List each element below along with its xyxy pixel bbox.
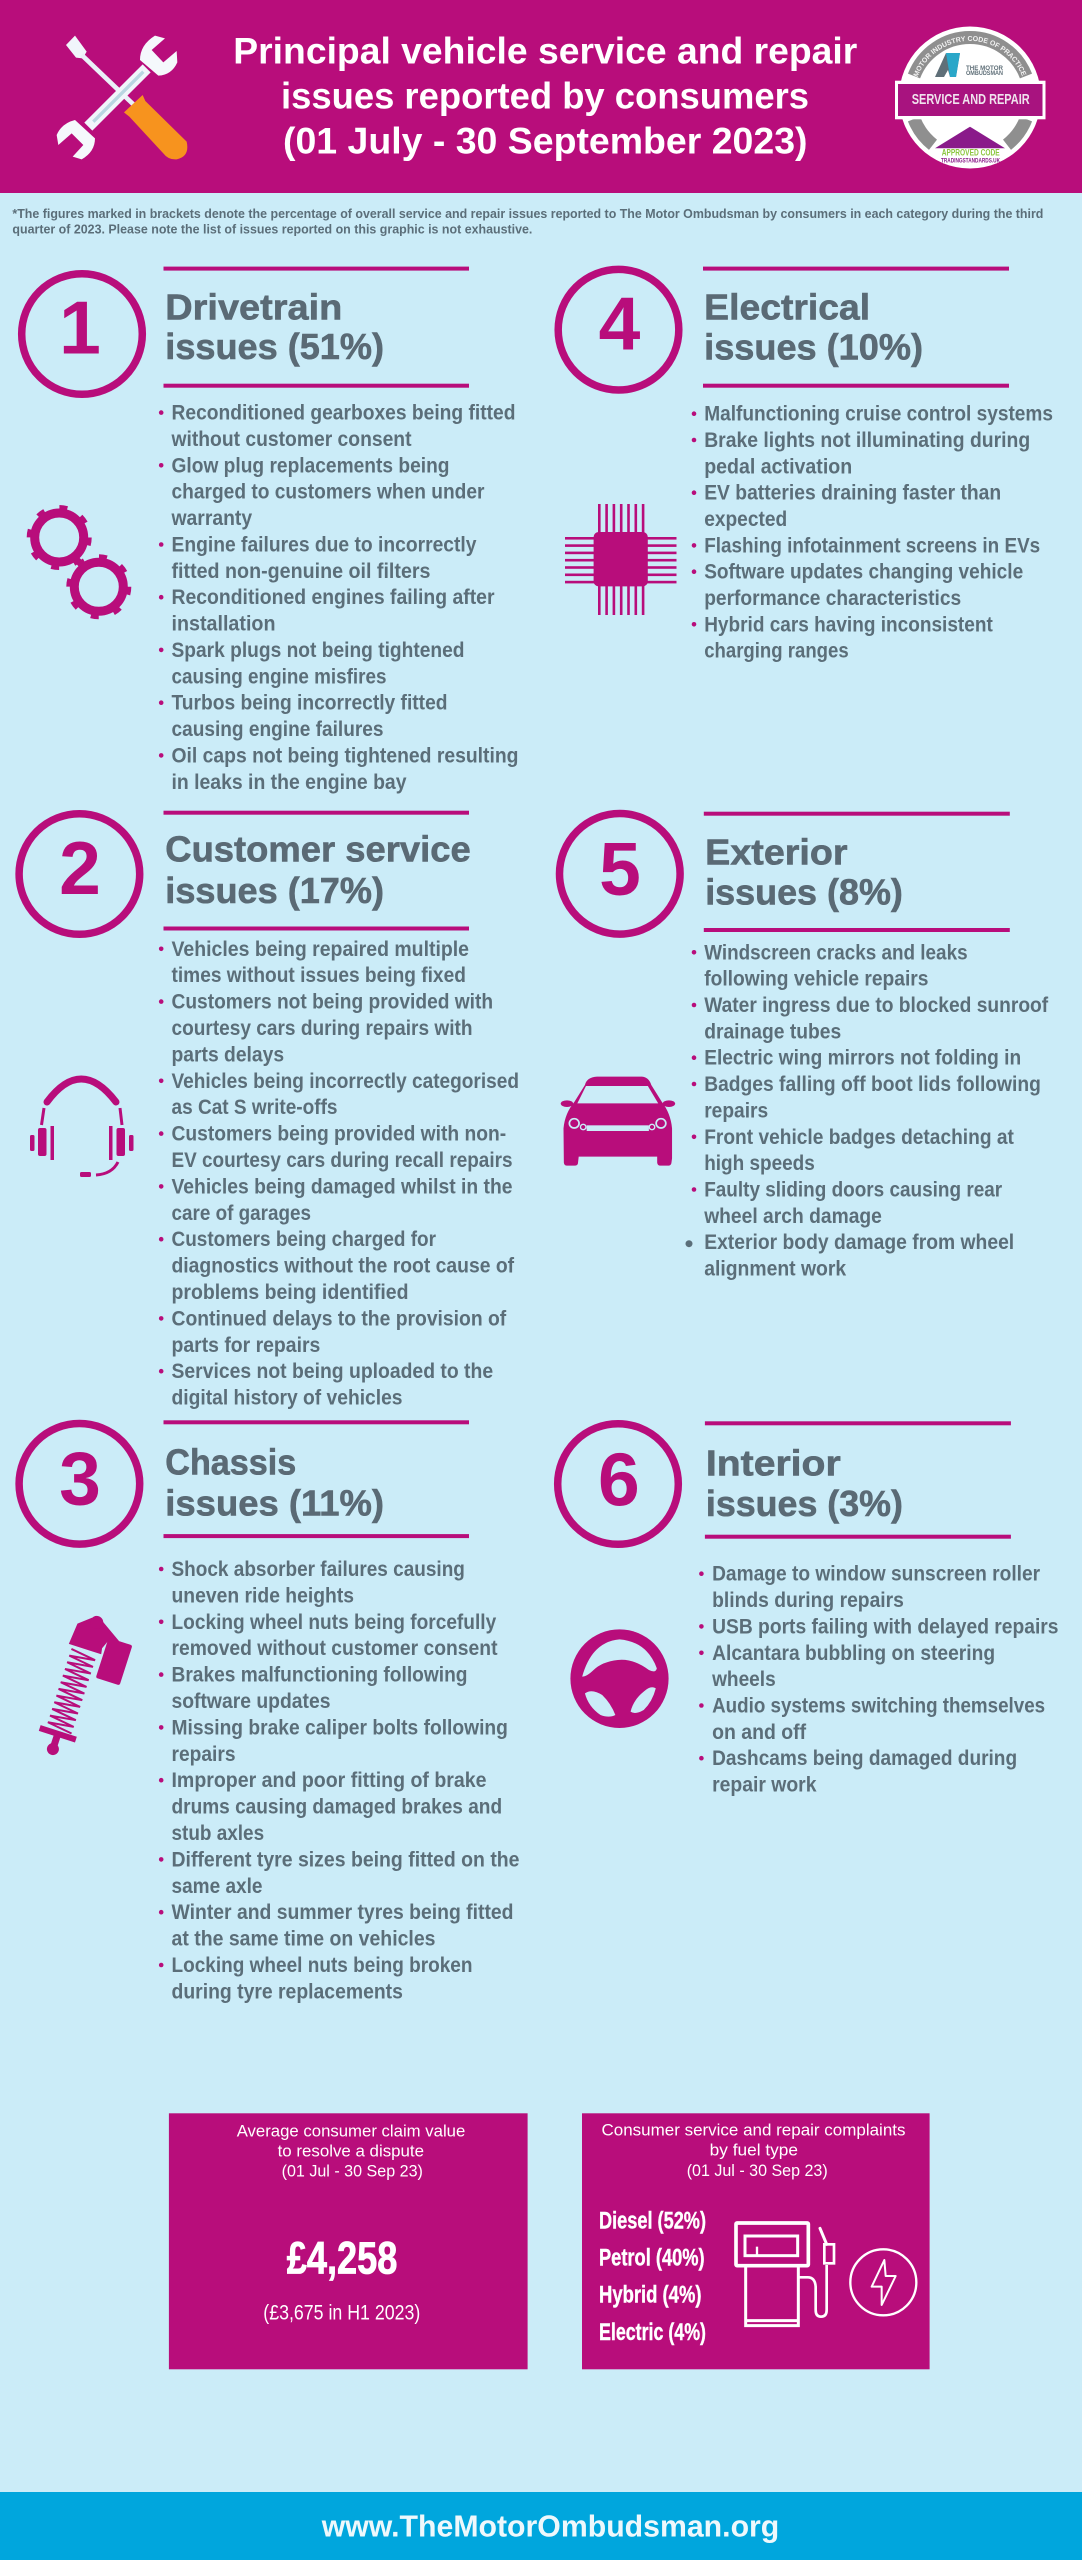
panel: exterior issues [560, 812, 1049, 1280]
issue list: electrical: Brake lights not illuminating during [704, 429, 1030, 452]
fuel type list: Hybrid (4%) [599, 2282, 702, 2309]
issue list: interior: Damage to window sunscreen roller [712, 1563, 1040, 1586]
issue list: interior: Alcantara bubbling on steering [712, 1642, 995, 1665]
issue list: chassis: Locking wheel nuts being broken [172, 1954, 472, 1977]
heading: drivetrain: Drivetrain [165, 287, 342, 328]
issue list: drivetrain: without customer consent [171, 428, 412, 451]
icon: electric bolt [850, 2249, 916, 2315]
stat box heading: Consumer service and repair complaints [602, 2121, 906, 2140]
icon: car [561, 1077, 675, 1166]
fuel type list: Diesel (52%) [599, 2207, 706, 2234]
heading: customer service: Customer service [165, 828, 471, 869]
heading: electrical: Electrical [704, 287, 870, 328]
issue list: interior: USB ports failing with delayed repairs [712, 1615, 1058, 1638]
issue list: customer service: courtesy cars during repairs with [172, 1017, 472, 1040]
issue list: exterior: following vehicle repairs [704, 968, 928, 991]
issue list: customer service: parts delays [172, 1043, 284, 1066]
number 3 [19, 1424, 140, 1544]
heading: exterior [704, 812, 1010, 932]
issue list: exterior: Badges falling off boot lids following [704, 1073, 1041, 1096]
number 4 [558, 269, 679, 390]
issue list: interior: blinds during repairs [712, 1589, 904, 1612]
issue list: drivetrain: Glow plug replacements being [172, 454, 450, 477]
panel: interior issues [558, 1421, 1058, 1796]
issue list: exterior: Water ingress due to blocked sunroof [704, 994, 1049, 1017]
issue list: drivetrain: Spark plugs not being tightened [172, 639, 464, 662]
issue list: customer service: diagnostics without the root cause of [172, 1255, 515, 1278]
heading: exterior: issues (8%) [705, 871, 903, 912]
heading: chassis: issues (11%) [165, 1483, 384, 1524]
issue list: chassis: software updates [172, 1690, 330, 1713]
heading: interior [705, 1421, 1011, 1539]
issue list: chassis: Shock absorber failures causing [172, 1558, 465, 1581]
issue list: drivetrain: Reconditioned engines failing after [172, 586, 494, 609]
website address: www.TheMotorOmbudsman.org [321, 2509, 779, 2544]
issue list: drivetrain: warranty [171, 507, 252, 530]
issue list: customer service: Customers being charged for [172, 1228, 436, 1251]
issue list: customer service: Continued delays to the provision of [172, 1307, 507, 1330]
issue list: chassis: Different tyre sizes being fitted on the [172, 1848, 520, 1871]
issue list: chassis: drums causing damaged brakes and [172, 1796, 502, 1819]
code of practice badge: TRADINGSTANDARDS.UK [941, 158, 1000, 164]
issue list: chassis: repairs [172, 1743, 236, 1766]
heading: drivetrain [164, 267, 469, 388]
heading: chassis [164, 1420, 469, 1538]
issue list: electrical: EV batteries draining faster than [704, 482, 1001, 505]
issue list: electrical: Hybrid cars having inconsistent [704, 613, 993, 636]
stat box heading: to resolve a dispute [278, 2142, 424, 2161]
issue list: exterior: Electric wing mirrors not folding in [704, 1047, 1021, 1070]
issue list: electrical: Malfunctioning cruise control systems [704, 403, 1053, 426]
issue list: interior: Audio systems switching themselves [712, 1694, 1045, 1718]
title: Principal vehicle service and repair [233, 30, 857, 71]
issue list: drivetrain: charged to customers when under [172, 481, 484, 504]
number 5: 5 [599, 827, 641, 911]
stat box heading: (01 Jul - 30 Sep 23) [282, 2162, 423, 2180]
heading: customer service [164, 811, 471, 930]
issue list: chassis: stub axles [172, 1822, 264, 1845]
icon: shock absorber [33, 1609, 138, 1768]
issue list: chassis: Brakes malfunctioning following [172, 1664, 468, 1687]
issue list: drivetrain: installation [172, 613, 276, 636]
heading: interior: Interior [706, 1443, 841, 1484]
issue list: customer service: problems being identified [172, 1281, 408, 1304]
issue list: electrical: expected [704, 508, 787, 531]
issue list: customer service: as Cat S write-offs [172, 1096, 338, 1119]
number 6: 6 [598, 1438, 640, 1522]
number 5 [560, 814, 680, 934]
number 4: 4 [599, 281, 641, 365]
issue list: interior [699, 1563, 1058, 1796]
issue list: electrical: charging ranges [704, 640, 849, 663]
code of practice badge [895, 26, 1046, 168]
title: (01 July - 30 September 2023) [283, 120, 808, 161]
fuel type list: Electric (4%) [599, 2319, 706, 2346]
issue list: drivetrain: in leaks in the engine bay [172, 771, 407, 794]
icon: steering wheel [570, 1629, 669, 1728]
issue list: exterior: Exterior body damage from wheel [704, 1231, 1014, 1254]
footnote [12, 206, 1043, 236]
issue list: customer service: Vehicles being repaired multiple [172, 938, 469, 961]
issue list: drivetrain: fitted non-genuine oil filters [172, 560, 430, 583]
issue list: customer service: care of garages [172, 1202, 311, 1225]
issue list: chassis: removed without customer consent [172, 1637, 498, 1660]
heading: interior: issues (3%) [706, 1483, 903, 1524]
heading: electrical [703, 267, 1009, 388]
header banner [0, 0, 1082, 193]
heading: exterior: Exterior [705, 831, 848, 872]
number 3: 3 [59, 1436, 101, 1520]
code of practice badge: MOTOR INDUSTRY CODE OF PRACTICE [913, 36, 1026, 77]
issue list: customer service: Customers being provided with non- [172, 1123, 506, 1146]
icon: fuel pump [736, 2223, 834, 2326]
issue list: customer service: Vehicles being damaged whilst in the [172, 1175, 512, 1198]
issue list: chassis: Locking wheel nuts being forcefully [172, 1611, 496, 1634]
issue list: chassis: same axle [172, 1875, 262, 1898]
issue list: interior: Dashcams being damaged during [712, 1747, 1017, 1770]
issue list: customer service: digital history of vehicles [172, 1387, 402, 1410]
panel: chassis issues [19, 1420, 519, 2003]
number 6 [558, 1424, 678, 1544]
stat box heading [237, 2122, 465, 2180]
stat box heading: Average consumer claim value [237, 2122, 465, 2141]
issue list: customer service: Vehicles being incorrectly categorised [172, 1070, 519, 1093]
number 1: 1 [59, 286, 101, 370]
issue list: exterior: drainage tubes [704, 1020, 841, 1043]
claim value figure: £4,258 [287, 2232, 397, 2283]
issue list: exterior: repairs [704, 1099, 768, 1122]
issue list: interior: wheels [711, 1668, 776, 1691]
issue list: electrical: Software updates changing vehicle [704, 561, 1023, 584]
issue list: customer service: Customers not being provided with [172, 991, 493, 1014]
issue list: electrical: performance characteristics [704, 587, 961, 610]
panel: electrical issues [558, 267, 1053, 663]
issue list: exterior: wheel arch damage [703, 1205, 882, 1228]
issue list: exterior: Front vehicle badges detaching at [704, 1126, 1014, 1149]
issue list: customer service: parts for repairs [172, 1334, 320, 1357]
issue list: drivetrain: Reconditioned gearboxes being fitted [172, 402, 516, 425]
code of practice badge: THE MOTOR [966, 65, 1003, 72]
issue list: customer service: EV courtesy cars during recall repairs [172, 1149, 512, 1172]
icon: microchip [565, 504, 676, 615]
title [233, 30, 857, 161]
icon: crossed wrench and screwdriver [57, 36, 187, 159]
footer bar [0, 2492, 1082, 2560]
heading: customer service: issues (17%) [165, 870, 384, 911]
stat box heading: by fuel type [710, 2141, 798, 2160]
stat box heading: (01 Jul - 30 Sep 23) [687, 2161, 828, 2180]
heading: electrical: issues (10%) [704, 327, 923, 368]
issue list: interior: on and off [712, 1721, 807, 1744]
issue list: exterior: alignment work [704, 1258, 846, 1280]
issue list: customer service: Services not being uploaded to the [172, 1360, 493, 1383]
heading: drivetrain: issues (51%) [165, 326, 384, 367]
issue list: electrical: pedal activation [704, 455, 852, 478]
number 1 [22, 274, 142, 394]
issue list: electrical: Flashing infotainment screens in EVs [704, 534, 1040, 557]
title: issues reported by consumers [281, 75, 809, 116]
icon: gears [29, 508, 129, 617]
stat box heading [602, 2121, 906, 2180]
comparison figure: (£3,675 in H1 2023) [263, 2301, 420, 2324]
number 2: 2 [59, 826, 101, 910]
code of practice badge: OMBUDSMAN [966, 70, 1003, 77]
issue list: customer service: times without issues being fixed [172, 964, 466, 987]
panel: customer service issues [19, 811, 519, 1410]
issue list: exterior: Windscreen cracks and leaks [704, 941, 968, 964]
number 2 [19, 814, 140, 934]
issue list: drivetrain: Oil caps not being tightened resulting [172, 744, 518, 767]
issue list: exterior [686, 941, 1049, 1280]
issue list: chassis: Winter and summer tyres being fitted [172, 1901, 514, 1924]
issue list: chassis: uneven ride heights [172, 1584, 354, 1607]
issue list: electrical [692, 403, 1053, 663]
issue list: drivetrain: causing engine misfires [172, 665, 386, 688]
fuel type list: Petrol (40%) [599, 2245, 705, 2272]
issue list: drivetrain: Engine failures due to incorrectly [172, 534, 477, 556]
issue list: chassis: during tyre replacements [172, 1980, 403, 2003]
issue list: chassis [159, 1558, 520, 2003]
issue list: drivetrain: causing engine failures [172, 718, 384, 741]
issue list: drivetrain [159, 402, 518, 794]
issue list: customer service [159, 938, 519, 1410]
stat box: average claim value [169, 2113, 528, 2369]
panel: drivetrain issues [22, 267, 518, 794]
issue list: chassis: at the same time on vehicles [172, 1928, 436, 1951]
issue list: interior: repair work [712, 1774, 817, 1796]
icon: headset [30, 1079, 134, 1177]
stat box: complaints by fuel type [582, 2113, 930, 2369]
issue list: exterior: high speeds [704, 1152, 815, 1175]
code of practice badge: SERVICE AND REPAIR [912, 91, 1030, 108]
issue list: chassis: Improper and poor fitting of brake [172, 1769, 486, 1792]
code of practice badge: APPROVED CODE [942, 148, 1000, 158]
issue list: chassis: Missing brake caliper bolts following [172, 1716, 508, 1739]
issue list: drivetrain: Turbos being incorrectly fitted [172, 692, 448, 715]
heading: chassis: Chassis [165, 1442, 296, 1482]
fuel type list [599, 2207, 706, 2346]
issue list: exterior: Faulty sliding doors causing rear [704, 1178, 1002, 1202]
footnote: *The figures marked in brackets denote the percentage of overall service and repair issues reported to The Motor Ombudsman by consumers in each category during the third [12, 206, 1043, 221]
footnote: quarter of 2023. Please note the list of issues reported on this graphic is not exhaustive. [12, 221, 532, 236]
